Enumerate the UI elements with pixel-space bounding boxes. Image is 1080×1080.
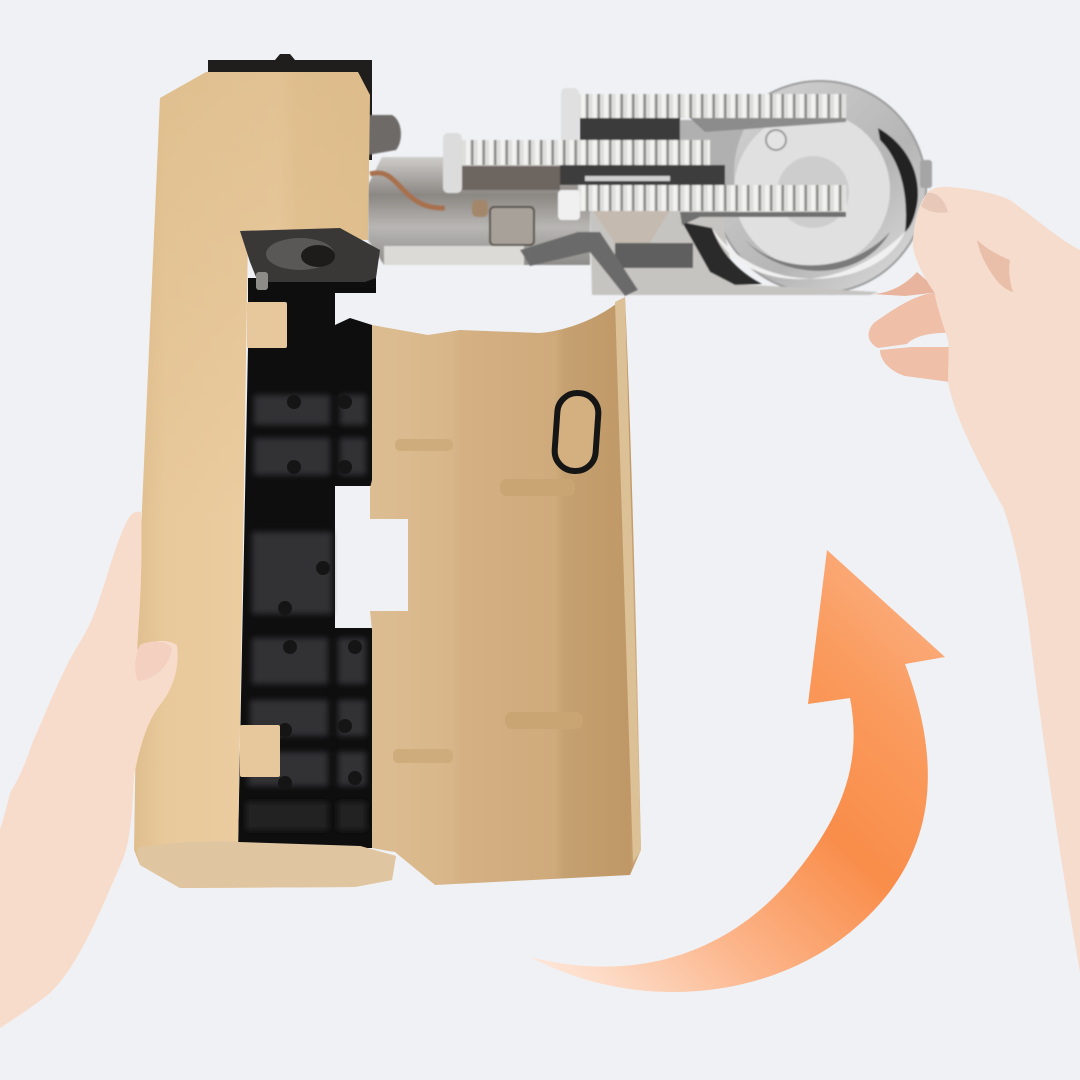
- rack bottom tail: [680, 212, 846, 225]
- hinge screw: [256, 272, 268, 290]
- disc knob: [920, 160, 932, 188]
- lower body reflection: [592, 210, 670, 243]
- screw: [766, 130, 786, 150]
- rack top bracket: [561, 88, 579, 150]
- door edge highlight: [615, 297, 641, 862]
- little finger: [880, 347, 950, 382]
- right hand fingers: [869, 272, 950, 382]
- arm shadow band: [445, 166, 560, 190]
- disc inner ring: [734, 112, 890, 268]
- hinge barrel: [266, 238, 334, 270]
- hinge center: [301, 245, 335, 267]
- arrow: [530, 550, 945, 992]
- lower body: [590, 208, 878, 295]
- bottom cap: [137, 841, 396, 888]
- door oval hole: [553, 392, 600, 472]
- rack bottom end: [558, 190, 580, 220]
- finger under disc: [873, 272, 940, 296]
- slot top: [580, 117, 680, 142]
- door slots: [393, 439, 583, 763]
- lever: [520, 232, 638, 296]
- lower left plate: [384, 246, 524, 265]
- slot highlight: [585, 176, 670, 181]
- arm: [368, 157, 590, 265]
- toothed rack middle: [444, 140, 710, 165]
- black ribbed inner frame: [238, 278, 376, 848]
- rack top tail: [690, 118, 846, 132]
- screw block: [368, 115, 401, 155]
- dark crescent: [878, 128, 918, 232]
- dark band: [615, 243, 693, 268]
- lower ring: [712, 228, 905, 279]
- device: [134, 54, 932, 888]
- top shade: [142, 72, 370, 520]
- brass nut: [472, 200, 488, 217]
- upper tab: [247, 302, 287, 348]
- copper wire: [370, 173, 445, 208]
- small cylinder: [490, 207, 534, 245]
- hinged door panel: [370, 297, 641, 885]
- disc center boss: [777, 156, 849, 228]
- main tan side panel: [134, 72, 396, 888]
- rack middle bracket: [443, 133, 462, 193]
- rear dark housing: [208, 54, 372, 160]
- rib cells: [246, 395, 366, 830]
- right hand and arm: [913, 187, 1080, 972]
- ring shadow: [745, 232, 890, 271]
- middle finger: [869, 293, 950, 348]
- thumb nail: [921, 193, 948, 213]
- lower tab: [240, 725, 280, 777]
- metal hinge bracket: [240, 228, 380, 290]
- slot middle: [560, 165, 725, 185]
- inner dark gear area: [682, 222, 762, 285]
- disc left plate: [680, 120, 750, 187]
- mechanism: [368, 81, 932, 296]
- toothed rack bottom: [578, 185, 846, 211]
- thumb nail: [135, 642, 172, 681]
- thumb crease shadow: [977, 240, 1013, 292]
- left hand: [0, 512, 178, 1028]
- disc: [714, 81, 926, 293]
- toothed rack top: [578, 94, 846, 118]
- rib dots: [278, 395, 362, 790]
